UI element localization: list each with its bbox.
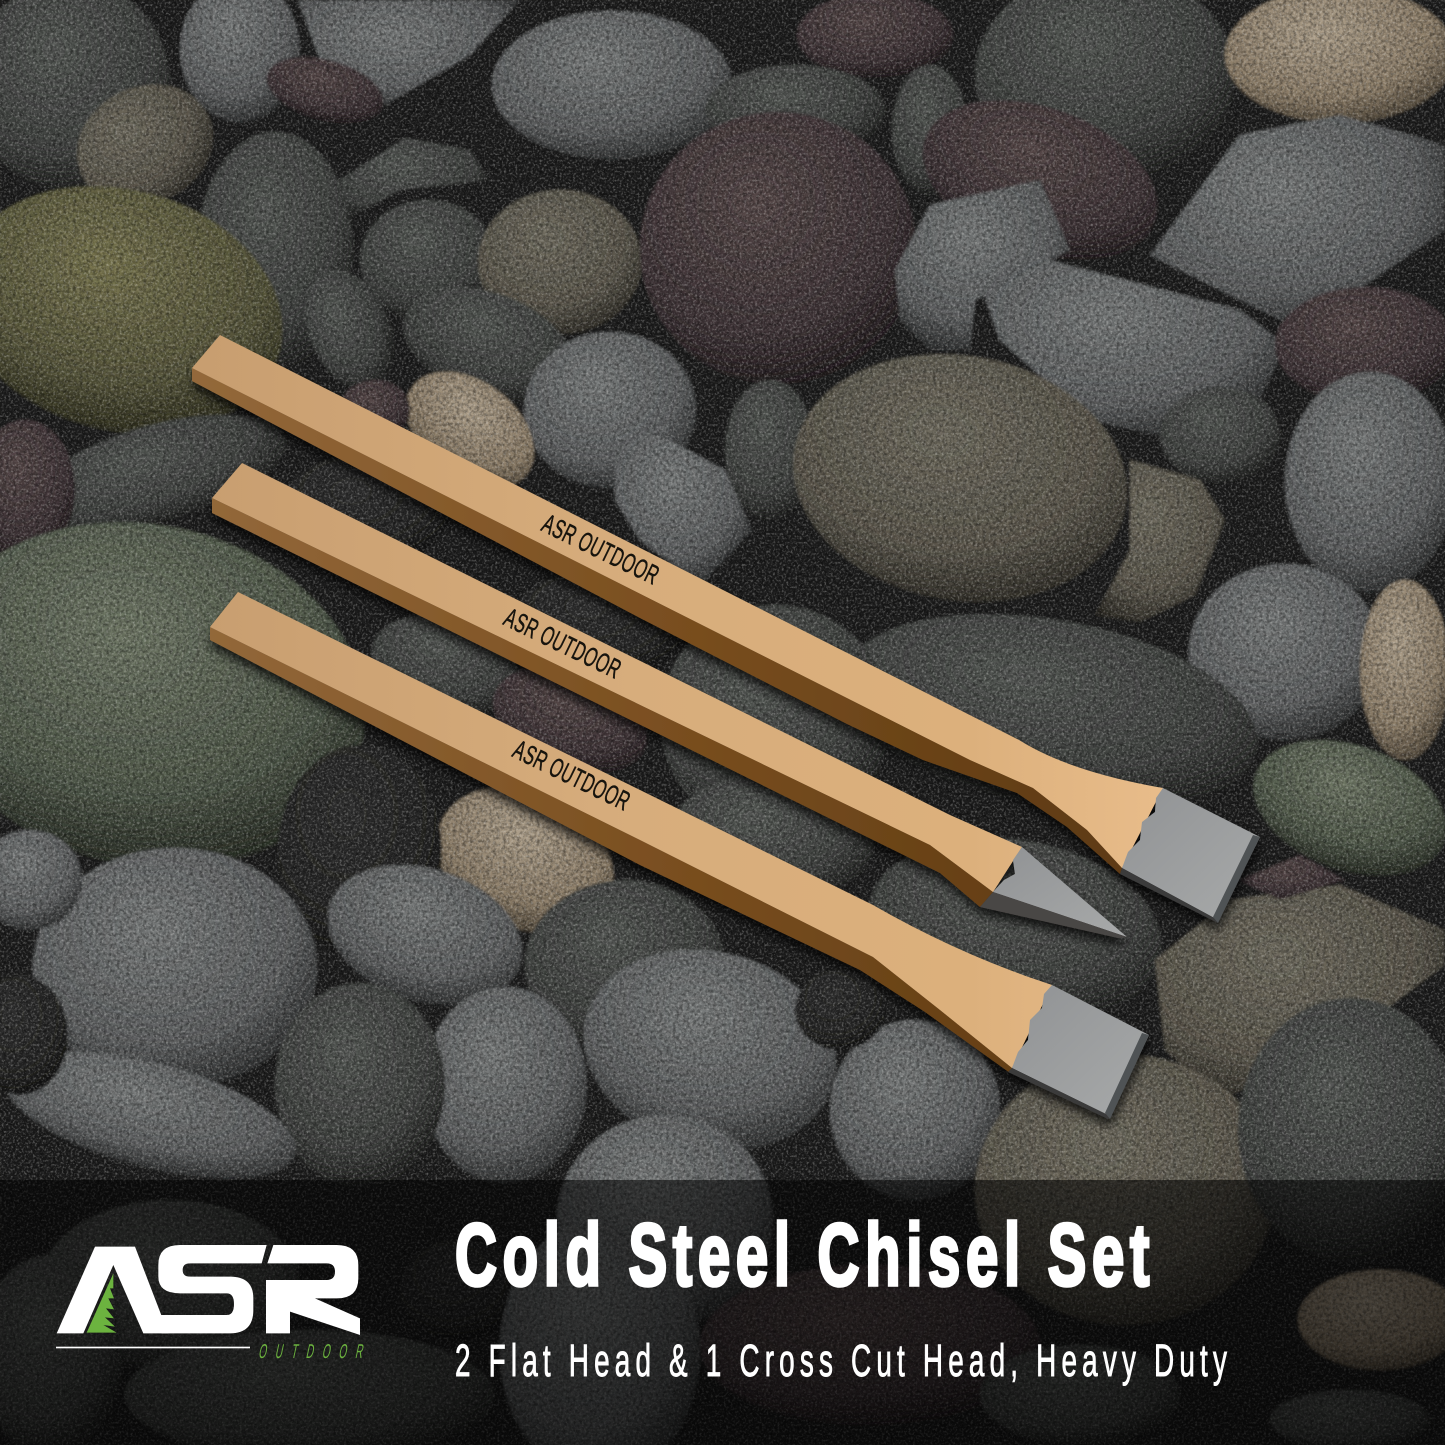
steel tip [1122, 788, 1260, 920]
subtitle: 2 Flat Head & 1 Cross Cut Head, Heavy Duty [455, 1335, 1227, 1386]
logo rule [56, 1347, 250, 1348]
title: Cold Steel Chisel Set [455, 1206, 1149, 1304]
logo: ASR Outdoor [56, 1245, 366, 1363]
steel lower edge [1008, 1068, 1110, 1119]
engraved brand: ASR OUTDOOR [499, 602, 626, 684]
lower stones [0, 745, 1445, 1445]
top row stones [0, 0, 1445, 227]
logo letter R [266, 1245, 360, 1335]
tip end face [1213, 835, 1260, 923]
point lower facet [980, 892, 1127, 938]
middle stones [0, 329, 1445, 907]
logo wordmark: OUTDOOR [257, 1341, 366, 1363]
lower bevel [212, 498, 993, 907]
engraved brand: ASR OUTDOOR [537, 508, 664, 590]
lower bevel [210, 627, 1012, 1073]
steel point [993, 847, 1127, 937]
icon: green pine tree [87, 1273, 117, 1333]
top face [212, 463, 1022, 892]
tip end face [1105, 1033, 1149, 1119]
steel lower edge [1120, 868, 1218, 923]
steel tip [1012, 985, 1149, 1116]
upper stones [0, 71, 1445, 520]
chisel 2: cross cut head, middle [212, 463, 1127, 938]
engraved brand: ASR OUTDOOR [508, 734, 635, 816]
logo letter A [57, 1247, 168, 1333]
top face [192, 335, 1163, 868]
chisel 1: flat head, top [192, 335, 1260, 923]
bottom dark caption band [0, 1180, 1445, 1445]
lower bevel [192, 368, 1122, 874]
chisel 3: flat head, bottom [210, 592, 1149, 1119]
logo letter S [153, 1245, 267, 1333]
top face [210, 592, 1052, 1068]
